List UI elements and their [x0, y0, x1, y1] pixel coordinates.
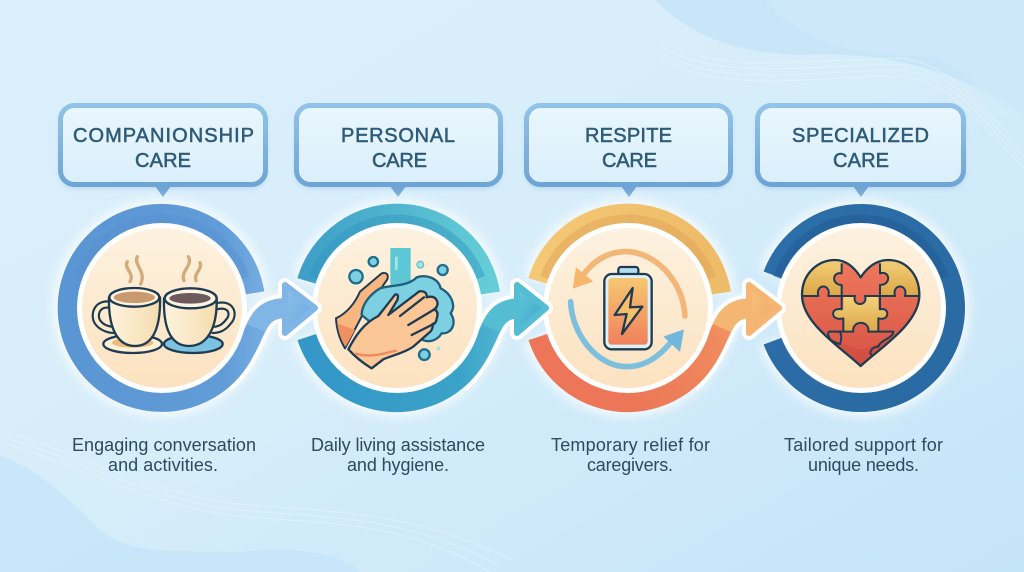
heading bubble: personal care: [296, 106, 501, 197]
heading bubble: specialized care: SPECIALIZED: [792, 125, 929, 147]
heading bubble: respite care: [526, 106, 731, 197]
icon: recharging battery: [571, 252, 685, 367]
heading bubble: personal care: CARE: [372, 150, 427, 172]
panel: personal care: [296, 106, 546, 475]
heading bubble: personal care: PERSONAL: [341, 125, 455, 147]
heading bubble: respite care: RESPITE: [585, 125, 672, 147]
description: companionship care: and activities.: [108, 455, 218, 475]
heading bubble: companionship care: CARE: [135, 150, 191, 172]
icon: puzzle heart: [800, 257, 922, 368]
ring and arrow: companionship care: [68, 214, 288, 402]
heading bubble: companionship care: COMPANIONSHIP: [73, 125, 254, 147]
description: specialized care: [784, 435, 943, 475]
heading bubble: specialized care: [757, 106, 964, 197]
ring and arrow: respite care: [538, 214, 754, 402]
heading bubble: specialized care: CARE: [833, 150, 889, 172]
icon: two coffee cups: [96, 257, 232, 353]
description: companionship care: [72, 435, 256, 475]
heading bubble: respite care: CARE: [602, 150, 657, 172]
description: personal care: and hygiene.: [347, 455, 449, 475]
arrow head: companionship to personal: [256, 285, 315, 333]
description: specialized care: unique needs.: [808, 455, 919, 475]
description: personal care: [311, 435, 485, 475]
panel: specialized care: [757, 106, 964, 475]
panel: respite care: [526, 106, 779, 475]
description: respite care: Temporary relief for: [551, 435, 710, 455]
panel: companionship care: [60, 106, 315, 475]
description: personal care: Daily living assistance: [311, 435, 485, 455]
description: companionship care: Engaging conversation: [72, 435, 256, 455]
ring: specialized care: [773, 214, 955, 402]
description: respite care: [551, 435, 710, 475]
arrow head: personal to respite: [491, 285, 546, 333]
description: respite care: caregivers.: [587, 455, 673, 475]
heading bubble: companionship care: [60, 106, 266, 197]
arrow head: respite to specialized: [722, 285, 779, 333]
description: specialized care: Tailored support for: [784, 435, 943, 455]
ring and arrow: personal care: [307, 214, 523, 402]
icon: washing hands: [336, 248, 454, 368]
